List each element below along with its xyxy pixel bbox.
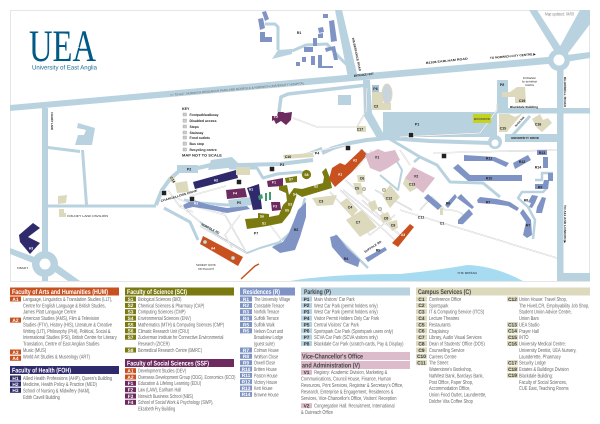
panel: Residences: R7 [243, 348, 249, 354]
panel: Residences: Britten House [254, 367, 277, 373]
map building labels: F1 [272, 180, 276, 184]
panel: Parking: Main Visitors' Car Park [314, 297, 355, 303]
panel: Campus Services: Estates & Buildings Division [519, 367, 569, 373]
panel: Campus Services: Restaurants [429, 322, 451, 328]
panel: Campus Services: C6 [418, 329, 425, 335]
map building labels: R12 [519, 160, 525, 164]
panel: Campus Services: Accommodation Office, [429, 386, 471, 392]
panel: Residences: Nelson Court and [254, 329, 283, 335]
map building labels: R10 [486, 176, 492, 180]
map building labels: R5 [376, 248, 380, 252]
panel: Campus Services: C14 [508, 329, 517, 335]
panel: Faculty of Science: Chemical Sciences & Pharmacy (CAP) [138, 303, 204, 309]
panel: Parking: Sportspark Car Park (Sportspark users only) [314, 329, 393, 335]
map building labels: S2 [314, 184, 318, 188]
map building labels: S6 [260, 214, 264, 218]
panel: Residences: R11 [242, 373, 251, 379]
panel: Faculty of Social Sciences: Overseas Development Group (ODG), Economics (ECO) [138, 375, 235, 381]
map building labels: A1 [338, 172, 342, 176]
panel: Residences: (guest suite) [254, 342, 275, 348]
panel: Residences: R2 [243, 303, 249, 309]
map building labels: P8 [500, 83, 504, 87]
H buildings navy [19, 170, 262, 254]
map road labels: WILBERFORCE ROAD [351, 37, 362, 72]
panel: Faculty of Arts and Humanities: A4 [12, 356, 19, 362]
bus stop icons [162, 132, 446, 202]
panel: Campus Services: Prayer Hall [519, 329, 539, 335]
key: Disabled access [190, 119, 217, 123]
panel: Residences: Suffolk Walk [254, 322, 275, 328]
panel: Faculty of Science: Computing Sciences (CMP) [138, 310, 186, 316]
panel: Faculty of Health [10, 366, 119, 401]
map building labels: S7 [289, 178, 293, 182]
panel: Faculty of Social Sciences: Education & Lifelong Learning (EDU) [138, 381, 201, 387]
logo: University of East Anglia: UEA [29, 21, 96, 71]
panel: Parking: SCVA Car Park (SCVA visitors only) [314, 335, 378, 341]
map road labels [17, 37, 567, 275]
panel: Parking [301, 288, 410, 348]
panel: Faculty of Science: Faculty of Science (SCI) [127, 289, 187, 296]
map road labels: SUFFOLK RD [363, 239, 383, 254]
map building labels: S4 [293, 192, 297, 196]
panel: Campus Services: Waterstone's Bookshop, [429, 367, 473, 373]
map road labels: NNUH [17, 266, 28, 270]
panel: Vice-Chancellor's Office and Administration: V2 [304, 404, 310, 410]
panel: Campus Services: Union Bars [519, 316, 539, 322]
panel: Faculty of Social Sciences: Norwich Business School (NBS) [138, 394, 193, 400]
map building labels: R13 [539, 151, 545, 155]
panel: Vice-Chancellor's Office and Administration: Communications, Council House, Finance, Human [301, 377, 391, 383]
panel: Campus Services: C10 [417, 354, 426, 360]
map building labels: P1 [415, 122, 419, 126]
arts buildings orange [200, 149, 414, 279]
panel: Campus Services: C5 [418, 322, 425, 328]
panel: Parking: West Car Park (permit holders only) [314, 303, 378, 309]
panel: Residences: R5 [243, 322, 249, 328]
panel: Faculty of Science: S7 [128, 335, 134, 341]
panel: Faculty of Health: School of Nursing & Midwifery (NAM), [23, 388, 91, 394]
panel: Faculty of Social Sciences: Law (LAW), Earlham Hall [138, 388, 181, 394]
map building labels: P4 [315, 152, 319, 156]
panel: Vice-Chancellor's Office and Administration: Vice-Chancellor's Office [302, 354, 363, 360]
panel: Residences: Suffolk Terrace [254, 316, 279, 322]
panel: Faculty of Science: S5 [128, 322, 134, 328]
panel: Parking: P6 [304, 329, 310, 335]
panel: Campus Services: C9 [418, 348, 425, 354]
panel: Campus Services: Chaplaincy [429, 329, 449, 335]
panel: Campus Services: CUE East, Teaching Rooms [519, 386, 569, 392]
map building labels: C2 [374, 104, 378, 108]
panel: Campus Services: C8 [418, 341, 425, 347]
logo: University of East Anglia: University of East Anglia [32, 64, 97, 72]
map road labels: CHANCELLORS DRIVE [160, 189, 198, 203]
key: Stairway [190, 131, 204, 135]
panel: Residences: Victory House [254, 380, 277, 386]
panel: Faculty of Science: S3 [128, 310, 134, 316]
panel: Campus Services: Student Union Advice Centre, [519, 310, 572, 316]
panel: Campus Services: C18 [508, 367, 517, 373]
map building labels: C16 [535, 122, 541, 126]
panel: Residences: R9 [243, 360, 249, 366]
panel: Faculty of Social Sciences: School of Social Work & Psychology (SWP), [138, 400, 214, 406]
panel: Vice-Chancellor's Office and Administration: V1 [304, 370, 310, 376]
panel: Campus Services: Library, Audio Visual Services [429, 335, 482, 341]
map road labels: COLNEY LANE PAVILION [67, 214, 108, 218]
map road labels: << TO A47, NORWICH RESEARCH PARK AND NORFOLK & NORWICH UNIVERSITY HOSPITAL [170, 81, 305, 97]
panel: Residences: Kett House [254, 386, 273, 392]
panel: Vice-Chancellor's Office and Administration: Resources, Print Services, Registrar & Secretary's Office, [301, 383, 404, 389]
panel: Faculty of Arts and Humanities: A1 [12, 297, 19, 303]
panel: Vice-Chancellor's Office and Administration: & Outreach Office [301, 410, 333, 416]
panel: Faculty of Arts and Humanities: American Studies (AMS), Film & Television [23, 316, 99, 322]
panel: Residences: R13 [242, 386, 251, 392]
map building labels: C19 [519, 99, 525, 103]
map road labels: SAINSBURY CENTRE [196, 263, 216, 267]
key: Recycling centre [190, 148, 217, 152]
map building labels: C11 [418, 216, 424, 220]
panel: Faculty of Social Sciences: F4 [128, 400, 134, 406]
sports oval [382, 84, 392, 104]
key: KEY [182, 107, 190, 111]
panel: Faculty of Social Sciences: F1 [128, 381, 134, 387]
panel: Faculty of Science: S6 [128, 329, 134, 335]
panel: Faculty of Arts and Humanities: Translation, Centre of East Anglian Studies [23, 342, 100, 348]
panel: Residences: Residences (R) [243, 289, 280, 296]
panel: Faculty of Science: S2 [128, 303, 134, 309]
panel: Faculty of Health: H2 [12, 382, 19, 388]
map building labels: C6 [360, 176, 364, 180]
panel: Campus Services: C13 [508, 322, 517, 328]
map building labels: R8 [524, 198, 528, 202]
panel: Faculty of Arts and Humanities: International Studies (PSI), British Centre for Literary [23, 335, 117, 341]
panel: Campus Services: INTO [519, 335, 529, 341]
map road labels: BLUEBELL ROAD [563, 77, 567, 108]
panel: Campus Services: Lecture Theatres [429, 316, 459, 322]
panel: Campus Services: Blackdale Building: [519, 373, 553, 379]
map building labels: C13 [409, 182, 415, 186]
map road labels: NORFOLK RD [201, 222, 221, 235]
panel: Parking: West Car Park (permit holders only) [314, 310, 378, 316]
map road labels: TO NORWICH CITY CENTRE ▶ [490, 52, 537, 60]
map building labels: F4 [233, 192, 237, 196]
panel: Faculty of Science: Environmental Sciences (ENV) [138, 316, 191, 322]
map building labels: R1 [297, 31, 301, 35]
map updated note: Map updated: 04/09 [545, 12, 574, 16]
panel: Campus Services: C12 [508, 297, 517, 303]
panel: Campus Services: C17 [508, 360, 517, 366]
footpaths [168, 88, 557, 258]
map building labels: R3 [194, 202, 198, 206]
map building labels: V1 [375, 156, 379, 160]
panel: Faculty of Arts and Humanities: Writing (LIT), Philosophy (PHI), Political, Social & [23, 329, 111, 335]
panel: Faculty of Social Sciences: F3 [128, 394, 134, 400]
map road labels: to seminar [522, 80, 537, 84]
panel: Campus Services: C4 [418, 316, 425, 322]
panel: Residences: Broadview Lodge [254, 335, 283, 341]
map building labels: A4 [211, 246, 215, 250]
map road labels: THE BROAD [457, 271, 478, 275]
panel: Residences: Paston House [254, 373, 278, 379]
panel: Faculty of Science: S1 [128, 297, 134, 303]
panel: Faculty of Science: Zuckerman Institute for Connective Environmental [138, 335, 223, 341]
panel: Faculty of Health: H3 [12, 388, 19, 394]
panel: Campus Services [416, 288, 590, 405]
panel: Campus Services: Campus Services (C) [418, 289, 471, 296]
panel: Campus Services: Sportspark [429, 303, 449, 309]
car park P6 box [372, 85, 379, 92]
map road labels: Norfolk Walk [514, 115, 526, 128]
panel: Campus Services: C2 [418, 303, 425, 309]
map building labels: C14 [169, 176, 176, 184]
panel: Faculty of Science: S4 [128, 316, 134, 322]
key: Steps [190, 125, 199, 129]
map building labels: P7 [254, 232, 258, 236]
map building labels: R6 [446, 202, 450, 206]
map building labels: S3 [288, 202, 292, 206]
panel: Faculty of Science: Biological Sciences (BIO) [138, 297, 182, 303]
panel: Residences: Orwell Close [254, 361, 275, 367]
panel: Faculty of Social Sciences: Faculty of Social Sciences (SSF) [127, 360, 209, 368]
panel: Campus Services: Dean of Students' Office (DOS) [429, 342, 485, 348]
panel: Vice-Chancellor's Office and Administration: Congregation Hall: Recruitment, International [314, 404, 394, 410]
panel: Faculty of Arts and Humanities: Music (MUS) [23, 348, 46, 354]
panel: Residences: Browne House [254, 392, 279, 398]
map building labels: H3 [29, 246, 33, 250]
map building labels: C3 [319, 200, 323, 204]
map building labels: R7 [486, 200, 490, 204]
panel: Faculty of Arts and Humanities: James Platt Language Centre [23, 310, 76, 316]
map building labels: C9 [391, 224, 395, 228]
map building labels: F2 [274, 115, 278, 119]
panel: Parking: P1 [304, 297, 310, 303]
panel: Parking: Parking (P) [304, 289, 331, 296]
panel: Faculty of Health: Faculty of Health (FOH) [12, 368, 71, 374]
panel: Residences: R4 [243, 316, 249, 322]
panel: Parking: P2 [304, 303, 310, 309]
key [182, 107, 223, 158]
panel: Residences: R14 [242, 392, 251, 398]
panel: Faculty of Social Sciences: F2 [128, 388, 134, 394]
panel: Residences: R12 [242, 380, 251, 386]
panel: Residences: R1 [243, 297, 249, 303]
panel: Faculty of Science: Research (ZICER) [138, 342, 170, 348]
map building labels: P2 [187, 168, 191, 172]
map building labels: R11 [486, 156, 492, 160]
road network [10, 10, 590, 281]
panel: Campus Services: Security Lodge [519, 361, 546, 367]
panel: Vice-Chancellor's Office and Administration: and Administration (V) [302, 362, 360, 370]
panel: Campus Services: Faculty of Social Sciences, [519, 380, 567, 386]
panel: Parking: Central Visitors' Car Park [314, 322, 359, 328]
panel: Campus Services: Launderette, Pharmacy [519, 354, 561, 360]
map road labels: ENTRANCE / EXIT [354, 72, 374, 78]
map building labels: F3 [273, 204, 277, 208]
map building labels: S1 [262, 222, 266, 226]
panel: Campus Services: NatWest Bank, Barclays Bank, [429, 373, 484, 379]
panel: Faculty of Science: Mathematics (MTH) & Computing Sciences (CMP) [138, 322, 224, 328]
panel: Residences: R6 [243, 329, 249, 335]
map building labels: C12 [386, 196, 392, 200]
panel: Residences: Norfolk Terrace [254, 310, 279, 316]
map building labels: C17 [357, 128, 363, 132]
panel: Residences [240, 288, 295, 398]
panel: Faculty of Social Sciences: A2 [127, 375, 134, 381]
residences buildings [183, 11, 553, 267]
panel: Faculty of Health: Allied Health Professions (AHP), Queen's Building [23, 376, 112, 382]
map building labels: P5 [237, 201, 241, 205]
panel: Parking: Blackdale Car Park (scratch-cards, Pay & Display) [314, 342, 404, 348]
panel: Campus Services: Post Office, Paper Shop, [429, 380, 473, 386]
panel: Parking: Visitor Permit Holders Only Car Park [314, 316, 379, 322]
map building labels: V2 [414, 174, 418, 178]
panel: Faculty of Health: Medicine, Health Policy & Practice (MED) [23, 382, 97, 388]
panel: Parking: P5 [304, 322, 310, 328]
panel: Faculty of Social Sciences: Development Studies (DEV) [138, 369, 186, 375]
panel: Campus Services: IT & Computing Service (ITCS) [429, 310, 484, 316]
green building strips [258, 192, 271, 201]
map road labels: COLNEY LANE [50, 112, 54, 130]
map building labels: R4 [344, 257, 348, 261]
panel: Campus Services: Union Food Outlet, Launderette, [429, 392, 487, 398]
panel: Faculty of Arts and Humanities: A2 [12, 318, 19, 324]
panel: Faculty of Arts and Humanities: Studies (FTV), History (HIS), Literature & Creative [23, 322, 112, 328]
food outlet circles [203, 187, 386, 260]
panel: Campus Services: C3 [418, 310, 425, 316]
panel: Faculty of Arts and Humanities: A3 [12, 350, 19, 356]
key: Bus stop [190, 142, 204, 146]
panel: Campus Services: University Dentist, UEA Nursery, [519, 348, 577, 354]
map building labels: S5 [285, 208, 289, 212]
panel: Faculty of Social Sciences [125, 359, 235, 413]
panel: Faculty of Arts and Humanities: World Art Studies & Museology (ART) [23, 354, 90, 360]
map frame [10, 10, 590, 282]
panel: Vice-Chancellor's Office and Administration: Registry: Academic Division, Marketing & [314, 370, 388, 376]
map building labels: R7 [526, 224, 530, 228]
panel: Faculty of Science [125, 288, 234, 354]
map building labels: R2 [294, 228, 298, 232]
panel: Faculty of Science: Climatic Research Unit (CRU) [138, 329, 189, 335]
map road labels: Blackdale Building [510, 105, 538, 109]
map building labels: R14 [535, 166, 541, 170]
panel: Campus Services: C11 [417, 360, 426, 366]
map building labels: A2 [353, 158, 357, 162]
panel: Vice-Chancellor's Office and Administration [301, 352, 410, 416]
panel: Residences: Colman House [254, 348, 279, 354]
bookshop block: BOOKHIVE [474, 117, 490, 121]
map building labels: C10 [285, 155, 291, 159]
panel: Campus Services: C16 [508, 341, 517, 347]
panel: Parking: P4 [304, 316, 310, 322]
map road labels: TO A11 AND LONDON ▶ [563, 205, 567, 244]
map road labels: rooms [525, 83, 535, 87]
panel: Campus Services: UEA Studio [519, 322, 540, 328]
panel: Residences: Constable Terrace [254, 303, 284, 309]
map building labels: H2 [214, 178, 218, 182]
panel: Campus Services: C7 [418, 335, 425, 341]
map building labels: P6 [373, 87, 378, 91]
panel: Residences: The University Village [254, 297, 290, 303]
panel: Faculty of Arts and Humanities: Language, Linguistics & Translation Studies (LLT), [23, 297, 113, 303]
panel: Campus Services: C1 [418, 297, 425, 303]
panel: Faculty of Arts and Humanities: Centre for English Language & British Studies, [23, 303, 106, 309]
panel: Campus Services: Conference Office [429, 297, 461, 303]
map building labels: C1 [440, 222, 444, 226]
panel: Parking: P8 [304, 341, 310, 347]
panel: Vice-Chancellor's Office and Administration: Research, Enterprise & Engagement, Residences & [301, 390, 394, 396]
panel: Faculty of Social Sciences: Elizabeth Fry Building [138, 407, 175, 413]
map building labels: H1 [249, 188, 253, 192]
panel: Residences: R10 [242, 367, 251, 373]
panel: Campus Services: The Street: [429, 361, 449, 367]
panel: Residences: R8 [243, 354, 249, 360]
bookshop block [473, 114, 491, 123]
panel: Faculty of Science: Biomedical Research Centre (BMRC) [138, 348, 202, 354]
panel: Campus Services: Counselling Service [429, 348, 464, 354]
panel: Faculty of Social Sciences: A1 [127, 368, 134, 374]
key: Footpath/walkway [190, 113, 219, 117]
panel: Vice-Chancellor's Office and Administration: Services, Vice-Chancellor's Office, Visitors' Reception [301, 396, 396, 402]
map building labels: C7 [356, 220, 360, 224]
the broad lake [290, 265, 523, 281]
map building labels: A3 [401, 233, 405, 237]
map building labels: C4 [348, 206, 352, 210]
panel: Campus Services: C15 [508, 335, 517, 341]
map road labels: B1108 EARLHAM ROAD [426, 57, 469, 65]
panel: Campus Services: Dolche Vita Coffee Shop [429, 399, 473, 405]
vice chancellor buildings pink [365, 149, 435, 193]
map road labels: Entrance [523, 76, 536, 80]
panel: Parking: P7 [304, 335, 310, 341]
map building labels: P3 [280, 163, 284, 167]
map building labels: C15 [500, 126, 506, 130]
panel: Faculty of Arts and Humanities [10, 288, 119, 362]
key: MAP NOT TO SCALE [182, 154, 223, 158]
panel: Residences: Wolfson Close [254, 354, 278, 360]
panel: Faculty of Science: S8 [128, 348, 134, 354]
science buildings olive [245, 168, 332, 229]
panel: Campus Services: The Hive/LCR, Employability Job Shop, [519, 303, 590, 309]
panel: Faculty of Arts and Humanities: Faculty of Arts and Humanities (HUM) [12, 289, 108, 296]
campus services buildings tan [58, 87, 552, 237]
panel: Campus Services: Careers Centre [429, 354, 456, 360]
panel: Faculty of Health: Edith Cavell Building [23, 395, 60, 401]
map building labels: R9 [538, 186, 542, 190]
map building labels [29, 31, 545, 261]
panel: Parking: P3 [304, 310, 310, 316]
panel: Campus Services: C19 [508, 373, 517, 379]
panel: Residences: R3 [243, 310, 249, 316]
panel: Campus Services: University Medical Centre: [519, 342, 566, 348]
map road labels: FOR VISUAL ARTS [198, 267, 214, 271]
map building labels: C5 [355, 186, 359, 190]
map building labels: S8 [304, 173, 309, 177]
faculty of social sciences buildings purple [226, 112, 292, 211]
key: Food outlets [190, 136, 210, 140]
panel: Campus Services: Union House: Travel Shop, [519, 297, 567, 303]
panel: Faculty of Health: H1 [12, 376, 19, 382]
map road labels: UNIVERSITY DRIVE [511, 136, 539, 140]
map building labels: C8 [384, 216, 388, 220]
